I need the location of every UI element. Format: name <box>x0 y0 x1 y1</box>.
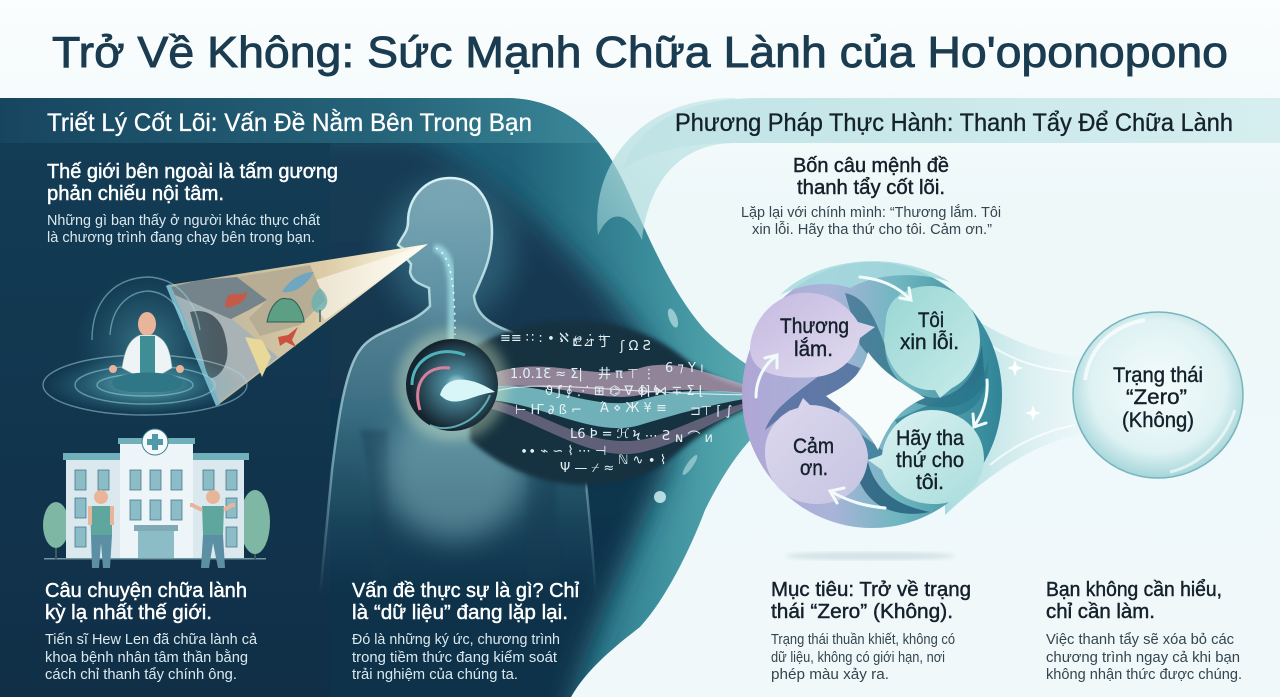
title: Trở Về Không: Sức Mạnh Chữa Lành của Ho'oponopono <box>52 28 1228 77</box>
text: goal: Mục tiêu: Trở về trạng <box>771 578 971 601</box>
text: healing story: kỳ lạ nhất thế giới. <box>45 601 212 624</box>
man right <box>190 490 235 568</box>
text: healing story <box>45 579 258 683</box>
decorative droplets <box>654 307 699 503</box>
blob: Tôi xin lỗi: xin lỗi. <box>900 331 959 354</box>
data glyphs: ⊏⊿ 丁 <box>572 335 611 350</box>
blob: Hãy tha thứ cho tôi: thứ cho <box>896 449 964 472</box>
panel: core philosophy <box>0 98 790 697</box>
data glyphs: ʃ Ω Ƨ <box>619 339 651 354</box>
tree right <box>240 490 270 560</box>
data glyphs: L6 Þ = ℋ <box>570 427 630 442</box>
text: four phrases: xin lỗi. Hãy tha thứ cho tôi. Cảm ơn.” <box>752 221 992 238</box>
text: healing story: khoa bệnh nhân tâm thần bằng <box>45 649 248 666</box>
mirror frame <box>168 285 218 405</box>
text: mirror statement <box>47 160 338 246</box>
text: goal <box>771 578 971 683</box>
text: goal: Trạng thái thuần khiết, không có <box>771 632 955 648</box>
text: healing story: cách chỉ thanh tẩy chính ông. <box>45 667 237 683</box>
text: just do it: chương trình ngay cả khi bạn <box>1046 650 1240 666</box>
data glyphs: ∙∙ ⌁ ∽ ⌇ ⋯ ⊣ <box>520 444 606 459</box>
heading: philosophy: Triết Lý Cốt Lõi: Vấn Đề Nằm Bên Trong Bạn <box>47 108 532 137</box>
text: mirror statement: Thế giới bên ngoài là tấm gương <box>47 160 338 183</box>
text: goal: phép màu xảy ra. <box>771 667 889 683</box>
data glyphs: Ψ — ⌿ ≈ <box>560 461 614 476</box>
data glyphs: Ϟ ⋯ Ƨ <box>632 429 670 444</box>
text: goal: dữ liệu, không có giới hạn, nơi <box>771 650 945 666</box>
text: just do it <box>1046 578 1242 683</box>
data glyphs: ϑ ƒ ∮ ⋰ ⊞ ⌬ ∇ ⊕ ϟ <box>545 384 661 399</box>
blob: Cảm ơn <box>765 398 868 504</box>
text: four phrases: Bốn câu mệnh đề <box>793 154 949 177</box>
data glyphs: ⊐⊤ ⌈ ∫ <box>690 404 733 419</box>
text: just do it: chỉ cần làm. <box>1046 600 1155 623</box>
text: just do it: không nhận thức được chúng. <box>1046 667 1242 683</box>
blob: Hãy tha thứ cho tôi: tôi. <box>916 471 944 494</box>
windpipe light stream <box>434 248 452 345</box>
blob: Hãy tha thứ cho tôi <box>868 410 984 504</box>
blob: Thương lắm <box>750 293 875 378</box>
bubble: Zero state: “Zero” <box>1126 386 1187 409</box>
panel: practice header and arcs <box>597 98 1280 240</box>
text: just do it: Bạn không cần hiểu, <box>1046 578 1222 601</box>
illustration: mirror projection beam <box>168 244 428 405</box>
text: mirror statement: là chương trình đang chạy bên trong bạn. <box>47 230 315 246</box>
data glyphs: ℕ ∿ ∙ ⌇ <box>618 453 666 468</box>
text: goal: thái “Zero” (Không). <box>771 600 953 623</box>
icon: chest vortex <box>396 329 508 441</box>
bubble: Zero state <box>1073 312 1243 478</box>
diagram: four-phrase cycle <box>742 261 1002 528</box>
bubble: Zero state: (Không) <box>1122 409 1194 432</box>
text: real problem: Vấn đề thực sự là gì? Chỉ <box>352 579 579 602</box>
building <box>66 459 244 558</box>
data glyphs: ⊢ Ҥ ∂ ß ⌐ <box>515 403 582 418</box>
text: healing story: Câu chuyện chữa lành <box>45 579 247 602</box>
blob: Thương lắm: lắm. <box>794 338 833 361</box>
illustration: meditating doctor <box>43 273 247 417</box>
text: real problem: trong tiềm thức đang kiểm soát <box>352 650 557 666</box>
text: real problem: trải nghiệm của chúng ta. <box>352 667 518 683</box>
data glyphs <box>500 331 733 476</box>
heading: practice: Phương Pháp Thực Hành: Thanh Tẩy Để Chữa Lành <box>675 109 1233 137</box>
text: mirror statement: Những gì bạn thấy ở người khác thực chất <box>47 213 320 229</box>
blob: Tôi xin lỗi <box>884 286 980 398</box>
blob: Cảm ơn: ơn. <box>800 457 828 480</box>
data glyphs: ɴ ⌒ ᴎ <box>675 431 713 446</box>
blob: Tôi xin lỗi: Tôi <box>918 309 944 332</box>
tree left <box>43 502 69 560</box>
blob: Cảm ơn: Cảm <box>793 435 834 458</box>
icon: glowing human body <box>320 178 596 595</box>
arrow flow to zero bubble <box>945 300 1090 515</box>
data glyphs: 6 ⁊ Y ı <box>665 361 704 376</box>
text: real problem: là “dữ liệu” đang lặp lại. <box>352 601 568 624</box>
man left <box>90 490 112 568</box>
data glyphs: 1.0.1Ɛ ≈ Σ| <box>510 367 583 382</box>
chart-like stream: data flow <box>470 320 772 485</box>
data glyphs: Ά ⋄ Ж ¥ ≡ <box>600 401 667 416</box>
data glyphs: ≡≡ ∷ ꞉ ∙ ℵ ℘ ∴ ⌗ <box>500 331 607 346</box>
center diamond <box>826 352 925 450</box>
bubble: Zero state: Trạng thái <box>1113 364 1203 387</box>
illustration: hospital and two men <box>43 429 270 568</box>
text: four phrases: Lặp lại với chính mình: “Thương lắm. Tôi <box>741 204 1001 221</box>
text: real problem: Đó là những ký ức, chương trình <box>352 632 560 648</box>
blob: Hãy tha thứ cho tôi: Hãy tha <box>896 427 964 450</box>
data glyphs: 井 π ⊤ ⋮ <box>598 367 656 382</box>
text: healing story: Tiến sĩ Hew Len đã chữa lành cả <box>45 632 258 648</box>
text: mirror statement: phản chiếu nội tâm. <box>47 182 224 205</box>
text: real problem <box>352 579 579 683</box>
data glyphs: ⌈⌉ ⋈ ∓ Ʃ ⌊ <box>640 384 704 399</box>
text: four phrases <box>741 154 1001 238</box>
text: four phrases: thanh tẩy cốt lõi. <box>797 176 945 199</box>
shadow under cycle <box>785 552 955 560</box>
cycle arrows <box>756 277 987 508</box>
text: just do it: Việc thanh tẩy sẽ xóa bỏ các <box>1046 632 1234 648</box>
blob: Thương lắm: Thương <box>780 315 849 338</box>
